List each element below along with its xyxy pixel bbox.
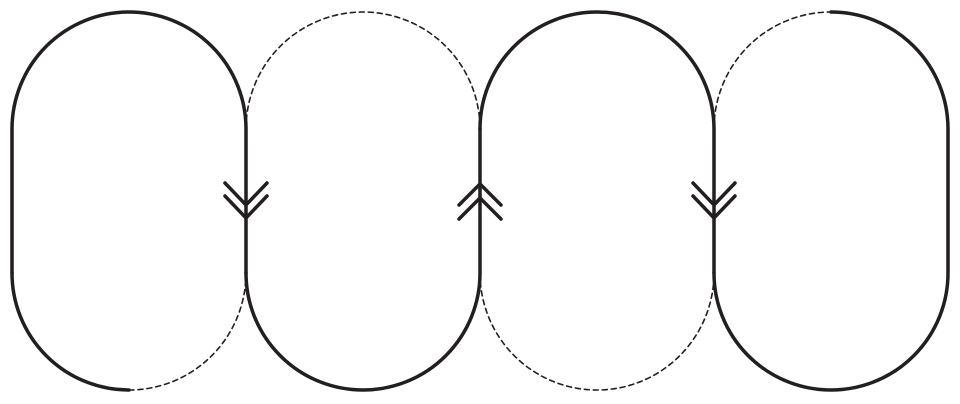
arrow: down at third junction: [693, 183, 735, 218]
arrow: up at second junction: [459, 184, 501, 219]
loop 3: [480, 12, 714, 390]
loop 4: [714, 12, 948, 390]
loop 2: [246, 12, 480, 390]
loop 1: [12, 12, 246, 390]
arrow: down at first junction: [225, 183, 267, 218]
